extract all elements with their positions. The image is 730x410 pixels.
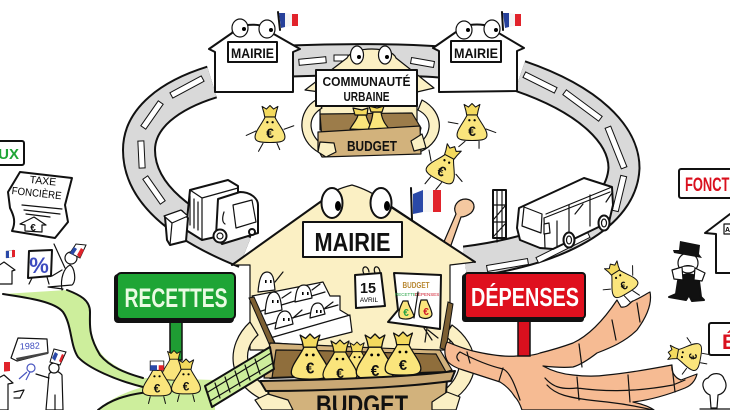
main flag: [411, 188, 441, 220]
eyes left town hall: [232, 19, 275, 38]
keys icon: [19, 364, 35, 380]
civil servant man with hat: [669, 241, 705, 301]
bags in community basket: [350, 106, 390, 130]
man with top hat lower: [36, 349, 66, 410]
small house right: [705, 214, 730, 273]
urban community building: [302, 46, 439, 157]
RECETTES sign: [114, 273, 235, 360]
bus windows: [522, 187, 612, 248]
money bags at recettes: €: [183, 379, 190, 393]
board money bags: €: [423, 307, 429, 318]
basket rim: [260, 371, 455, 391]
bus stop post: [493, 190, 506, 242]
hands community: [318, 134, 426, 157]
right label fonctionnement: [679, 169, 730, 198]
money bags at recettes: [143, 351, 200, 404]
small house with flag left upper: [0, 250, 15, 284]
calendar 15 avril: [355, 267, 385, 308]
arms of main town hall: [233, 322, 475, 402]
main town hall: [232, 185, 475, 350]
calendar 15 avril: AVRIL: [360, 297, 379, 304]
calendar 1982: [11, 338, 48, 361]
sign communauté urbaine: COMMUNAUTÉ: [322, 74, 410, 89]
budget board: BUDGET: [402, 281, 430, 290]
label BUDGET community: BUDGET: [347, 138, 397, 155]
money bag on finger: €: [618, 279, 631, 293]
bus wheels: [564, 216, 610, 248]
road ring: [139, 58, 624, 268]
money bags at recettes: €: [154, 381, 161, 395]
community arms: [302, 100, 439, 153]
sign communauté urbaine: URBAINE: [344, 90, 390, 104]
board money bags: €: [403, 308, 409, 319]
calendar 15 avril: 15: [360, 280, 376, 297]
document taxe foncière: [8, 172, 72, 238]
small house with flag left lower: [0, 362, 24, 410]
main budget basket: [249, 297, 460, 410]
french flag right: [502, 12, 521, 30]
house icon with euro: €: [30, 223, 36, 234]
small town hall left: [209, 12, 300, 92]
budget board: RECETTES: [395, 292, 419, 297]
main sign MAIRIE: MAIRIE: [314, 227, 390, 257]
truck cab: [216, 192, 258, 244]
basket front: [268, 378, 447, 410]
sign communauté urbaine: [316, 70, 417, 106]
money bags in basket: €: [371, 363, 380, 380]
tree: [700, 374, 730, 409]
bus mirror and lights: [544, 223, 550, 234]
money bag walking right: [448, 104, 496, 148]
budget board: DÉPENSES: [415, 291, 439, 297]
DÉPENSES sign: DÉPENSES: [471, 282, 579, 312]
money bag falling: €: [435, 162, 449, 180]
garbage bin: [164, 210, 188, 245]
man with striped hat upper: [48, 244, 86, 290]
sign MAIRIE right: MAIRIE: [454, 45, 498, 61]
garbage truck: [164, 180, 258, 245]
green ladder into basket: [205, 347, 274, 407]
RECETTES sign: RECETTES: [124, 283, 228, 313]
left label impôts locaux: [0, 141, 24, 165]
money bag falling: [414, 137, 475, 199]
money bag sliding on finger: €: [687, 352, 700, 361]
eyes right town hall: [456, 20, 500, 39]
money bag walking left: [246, 106, 294, 151]
document taxe foncière: TAXE: [29, 174, 57, 189]
bus: [517, 178, 613, 249]
small town hall right: [433, 12, 524, 92]
hands main: [255, 392, 460, 410]
percent board: %: [29, 253, 49, 278]
french flag left: [278, 12, 298, 30]
DÉPENSES sign: [462, 273, 585, 356]
board money bags: [399, 300, 432, 319]
document taxe foncière: FONCIÈRE: [11, 184, 62, 202]
calendar 1982: 1982: [20, 340, 40, 352]
sign MAIRIE left: MAIRIE: [231, 45, 274, 61]
council seats: [252, 272, 352, 345]
percent board: [28, 250, 52, 284]
money bags in basket: €: [336, 365, 344, 381]
eyes community: [350, 46, 392, 64]
finger grooves and bands: [457, 303, 685, 410]
main eyes: [322, 188, 392, 218]
green revenue river: [3, 290, 215, 410]
money bag walking left: €: [266, 125, 274, 141]
money bags in basket: €: [399, 358, 407, 374]
money bag sliding on finger: [665, 335, 711, 378]
spoon handle: [443, 199, 474, 248]
small house right: A: [725, 227, 730, 234]
truck cargo: [186, 180, 238, 240]
money bag on finger: [594, 255, 648, 311]
money bags in basket: [291, 332, 421, 381]
money bag walking right: €: [468, 123, 476, 139]
right label é: [709, 323, 730, 355]
peach expenses hand branches: [445, 292, 697, 410]
money bags in basket: €: [306, 361, 315, 378]
budget board: [388, 273, 441, 342]
council figures: [258, 272, 333, 329]
truck wheels: [214, 229, 255, 242]
